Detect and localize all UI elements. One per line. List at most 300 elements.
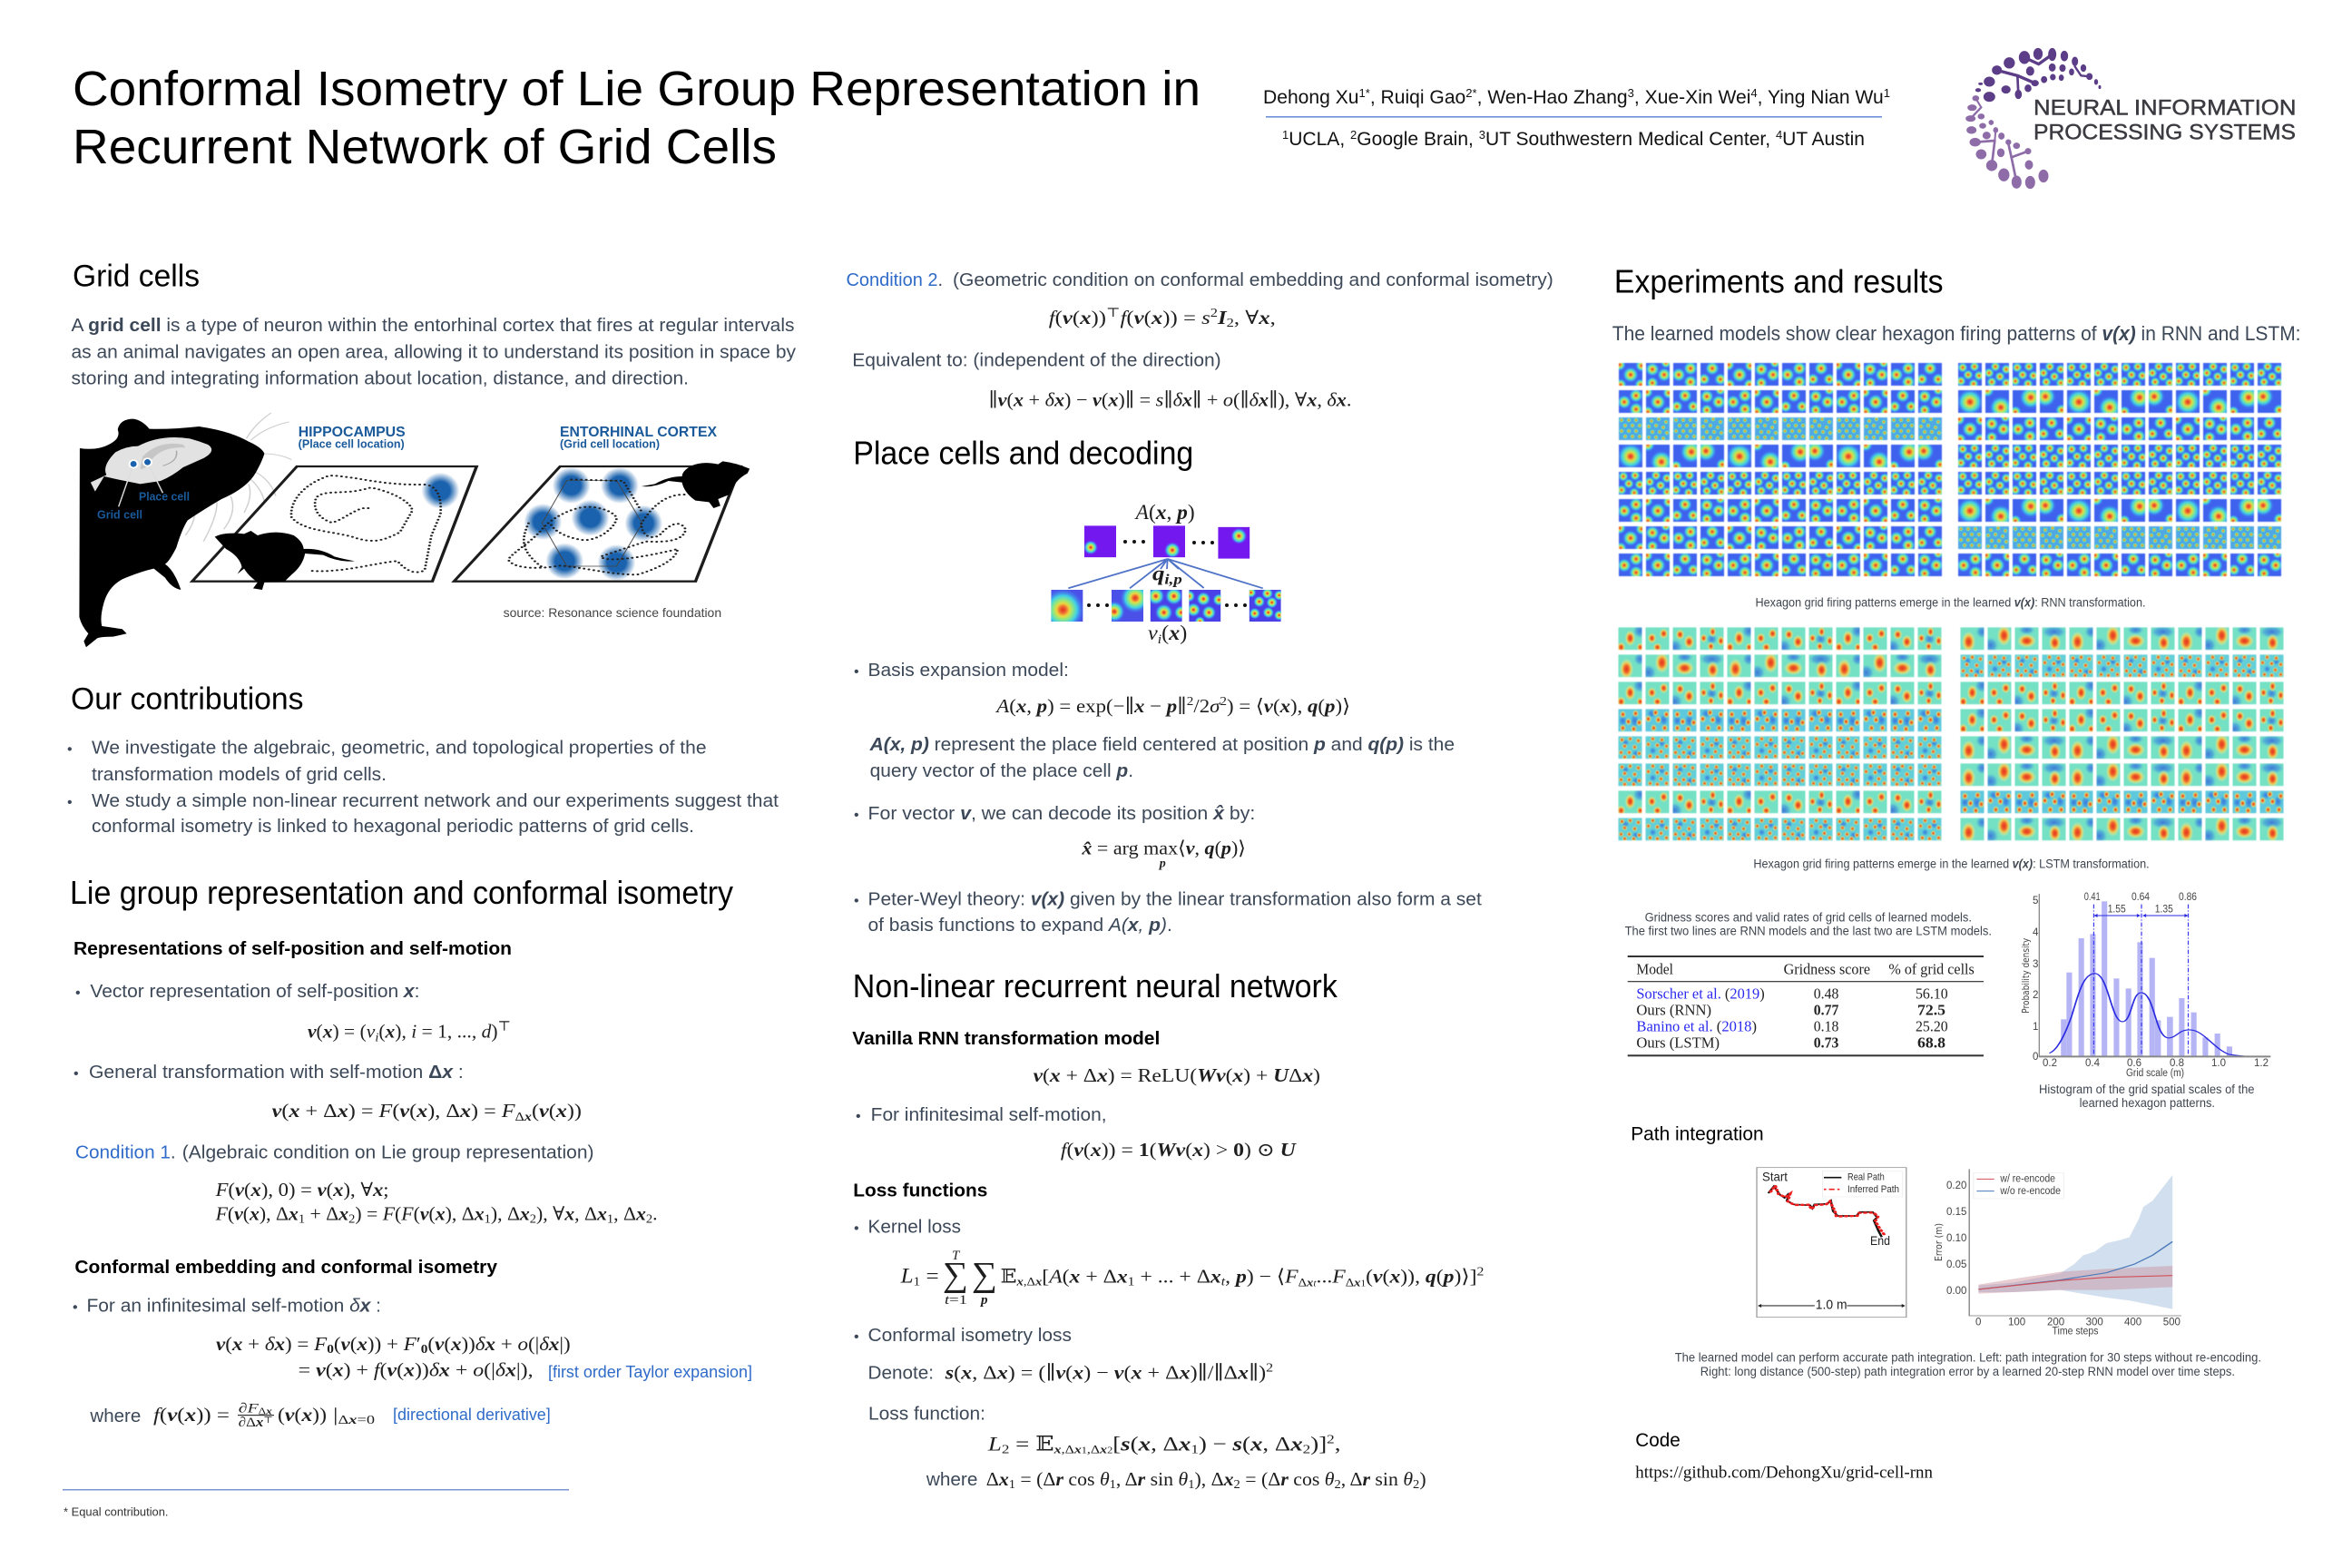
chart: grid scale histogram: 0.6 bbox=[2127, 1058, 2141, 1069]
condition 1: (Algebraic condition on Lie group representation) bbox=[182, 1143, 594, 1163]
chart: grid scale histogram: Grid scale (m) bbox=[2126, 1068, 2184, 1079]
equations: condition 1: 2 bbox=[646, 1212, 652, 1227]
caption: histogram bbox=[2039, 1083, 2254, 1110]
panel: experiments and results bbox=[1612, 263, 2301, 1482]
illustration: rat, place cells and grid cells bbox=[79, 413, 750, 647]
chart: grid scale histogram: 0.41 bbox=[2084, 892, 2101, 903]
equation: A(x,p): 2 bbox=[1187, 695, 1193, 709]
affiliations: UT Austin bbox=[1782, 129, 1865, 150]
equation: condition 2: I bbox=[1217, 307, 1228, 328]
link: repository: https://github.com/DehongXu/grid-cell-rnn bbox=[1635, 1463, 1933, 1482]
equation: L1: x1 bbox=[1354, 1276, 1366, 1289]
caption: path integration: Right: long distance (500-step) path integration error by a learned 20-step RNN model over time steps. bbox=[1700, 1365, 2235, 1378]
chart: grid scale histogram: 0.86 bbox=[2179, 892, 2197, 903]
chart: grid scale histogram: 4 bbox=[2033, 927, 2039, 938]
list: contributions bbox=[67, 739, 779, 837]
affiliations: 2 bbox=[1350, 128, 1357, 142]
chart: path integration error: 100 bbox=[2008, 1318, 2025, 1328]
affiliations: 4 bbox=[1776, 128, 1782, 142]
table: gridness scores: Sorscher et al. (2019) bbox=[1636, 985, 1765, 1003]
panel: place cells and decoding bbox=[853, 434, 1482, 936]
diagram: basis expansion: x) bbox=[1169, 622, 1187, 644]
equation: directional derivative: Δ bbox=[259, 1406, 267, 1416]
chart: path integration error: 400 bbox=[2124, 1318, 2141, 1328]
table: gridness scores: 0.77 bbox=[1814, 1001, 1839, 1018]
authors: Dehong Xu bbox=[1263, 87, 1358, 108]
equation: A(x,p): ) = ⟨ bbox=[1227, 695, 1264, 717]
equation: L1: 𝔼 bbox=[1000, 1265, 1015, 1287]
equation: directional derivative: | bbox=[333, 1404, 337, 1426]
equation: directional derivative: (v(x)) bbox=[278, 1404, 327, 1426]
bullet: Peter-Weyl: • bbox=[854, 893, 859, 908]
equation: L1: 1 bbox=[1128, 1276, 1135, 1289]
equations: condition 1: 1 bbox=[607, 1212, 613, 1227]
equation: condition 2: x, bbox=[1259, 307, 1275, 328]
equation: directional derivative bbox=[89, 1401, 551, 1430]
equations: Taylor expansion: = v(x) + f(v(x))δx + o(|δx|), bbox=[299, 1358, 534, 1380]
diagram: entorhinal cortex arena bbox=[454, 466, 740, 582]
equations: Taylor expansion: v(x)) + F′ bbox=[341, 1333, 420, 1355]
equation: where delta x: 2 bbox=[1234, 1478, 1240, 1492]
text: place field explanation bbox=[869, 735, 1455, 781]
panel: non-linear recurrent neural network bbox=[852, 967, 1484, 1492]
equation: argmax: x̂ = arg max⟨v, q(p)⟩ bbox=[1081, 838, 1246, 859]
equations: condition 1: F(v(x), 0) = v(x), ∀x; bbox=[215, 1179, 389, 1200]
condition 2 statement: (Geometric condition on conformal embedding and conformal isometry) bbox=[953, 270, 1553, 290]
title: Recurrent Network of Grid Cells bbox=[73, 120, 777, 174]
bullet: basis expansion model: Basis expansion model: bbox=[867, 661, 1069, 681]
icon: small rat, entorhinal arena bbox=[642, 461, 750, 508]
chart: grid scale histogram: 0.8 bbox=[2170, 1058, 2184, 1069]
equations: Taylor expansion: v(x + δx) = F bbox=[216, 1333, 326, 1355]
equation: where delta x: r sin θ bbox=[1138, 1468, 1188, 1490]
equation: L1: x bbox=[1015, 1274, 1024, 1289]
table: gridness scores: Ours (LSTM) bbox=[1636, 1034, 1720, 1051]
authors: , Xue-Xin Wei bbox=[1634, 87, 1750, 108]
equation: where delta x: , Δ bbox=[1116, 1468, 1138, 1490]
equations: Taylor expansion: 0 bbox=[327, 1343, 334, 1357]
equation: L1: t=1 bbox=[945, 1293, 967, 1308]
equation: directional derivative: ∂Δx bbox=[239, 1416, 262, 1430]
equations: Taylor expansion: v(x))δx + o(|δx|) bbox=[435, 1333, 570, 1355]
equation: condition 2: ⊤ bbox=[1106, 307, 1121, 320]
list: contributions: conformal isometry is linked to hexagonal periodic patterns of grid cells. bbox=[92, 817, 694, 837]
chart: path integration error: Time steps bbox=[2053, 1327, 2099, 1338]
heading: grid cells: Grid cells bbox=[73, 260, 200, 294]
illustration: rat, place cells and grid cells: (Grid cell location) bbox=[560, 437, 660, 450]
caption: table: The first two lines are RNN models and the last two are LSTM models. bbox=[1625, 925, 1992, 938]
equation: condition 2: 2 bbox=[1210, 307, 1218, 320]
table: gridness scores: Gridness score bbox=[1784, 960, 1870, 977]
chart: path integration error: 0.10 bbox=[1946, 1233, 1966, 1244]
diagram: hippocampus arena bbox=[192, 466, 476, 582]
illustration: rat, place cells and grid cells: HIPPOCAMPUS bbox=[299, 425, 406, 440]
equation: where delta x: 2 bbox=[1335, 1478, 1341, 1492]
equation: L2: s(x, Δ x bbox=[1233, 1432, 1300, 1455]
equation: L1: Δ bbox=[1346, 1276, 1354, 1289]
heading: place cells: Place cells and decoding bbox=[853, 434, 1193, 471]
equations: Taylor expansion: [first order Taylor expansion] bbox=[548, 1363, 752, 1381]
equation: L1: [ bbox=[1042, 1265, 1049, 1287]
bullet: infinitesimal: For infinitesimal self-motion, bbox=[871, 1105, 1107, 1125]
list: contributions: • bbox=[67, 742, 73, 758]
bullet: basis expansion model: • bbox=[854, 664, 859, 680]
equation: argmax: p bbox=[1159, 858, 1166, 871]
list: contributions: We investigate the algebraic, geometric, and topological properties of the bbox=[92, 739, 706, 759]
equation: where delta x: , Δ bbox=[1341, 1468, 1362, 1490]
chart: path trajectory: Real Path bbox=[1847, 1172, 1885, 1183]
equation: A(x,p): A(x, p) = exp(−∥ x − p∥ bbox=[996, 695, 1186, 717]
equation: denote s: 2 bbox=[1266, 1362, 1273, 1376]
equation: L1: F bbox=[1331, 1265, 1346, 1287]
equations: condition 1: F(F(v(x), Δx bbox=[383, 1203, 484, 1225]
equation: L2: ,Δx1,Δx2 bbox=[1062, 1442, 1112, 1455]
equation: v(x): i bbox=[375, 1031, 378, 1045]
equation: F: v(x + Δ x) = F(v(x), Δx) = F bbox=[272, 1100, 514, 1122]
table: gridness scores: % of grid cells bbox=[1888, 960, 1975, 977]
equation: directional derivative: ∂F bbox=[239, 1401, 256, 1416]
bullet: general transformation: General transformation with self-motion Δx : bbox=[89, 1063, 464, 1083]
chart: path integration error: 0.20 bbox=[1946, 1181, 1966, 1191]
equations: Taylor expansion: ( bbox=[334, 1333, 341, 1355]
chart: grid scale histogram: 1.2 bbox=[2254, 1058, 2269, 1069]
header bbox=[73, 48, 2296, 189]
equation: v(x): ⊤ bbox=[498, 1020, 511, 1034]
equation: L2: x bbox=[1053, 1442, 1062, 1455]
text: grid cell definition: as an animal navigates an open area, allowing it to understand its position in space by bbox=[71, 343, 796, 363]
affiliations: 3 bbox=[1479, 128, 1485, 142]
panel: Lie group representation and conformal isometry bbox=[70, 874, 752, 1430]
icon: small rat, hippocampus arena bbox=[215, 531, 355, 590]
equation: L1: ∑ bbox=[943, 1256, 968, 1294]
equation: L2: 2 bbox=[1303, 1443, 1310, 1456]
equation: A(x,p): σ bbox=[1210, 695, 1221, 717]
caption: RNN heatmaps: Hexagon grid firing patterns emerge in the learned v(x): RNN transformation. bbox=[1755, 595, 2145, 609]
table: gridness scores: 72.5 bbox=[1917, 1001, 1945, 1018]
footnote: * Equal contribution. bbox=[64, 1505, 169, 1519]
equation: L2: L bbox=[987, 1432, 1002, 1455]
equation: where delta x: 2 bbox=[1413, 1478, 1419, 1492]
authors: 3 bbox=[1628, 86, 1634, 100]
equations: condition 1: ), ∀ bbox=[536, 1203, 565, 1225]
equation: L2: 2 bbox=[1327, 1433, 1335, 1446]
subheading: conformal embedding: Conformal embedding and conformal isometry bbox=[74, 1258, 498, 1278]
heatmap grid: RNN right bbox=[1958, 363, 2281, 576]
equation: L2: = 𝔼 bbox=[1009, 1432, 1054, 1455]
logo: NeurIPS: PROCESSING SYSTEMS bbox=[2034, 120, 2296, 144]
chart: path integration error: 0.05 bbox=[1946, 1259, 1966, 1270]
equations: condition 1: x, Δx bbox=[564, 1203, 607, 1225]
chart: path integration error: 200 bbox=[2047, 1318, 2064, 1328]
equation: A(x,p): v(x), q(p)⟩ bbox=[1264, 695, 1349, 717]
chart: grid scale histogram: 1.35 bbox=[2155, 905, 2173, 916]
equation: L1: ∑ bbox=[972, 1256, 997, 1294]
equation: F: x bbox=[524, 1111, 532, 1124]
equation: where delta x: ) bbox=[1419, 1468, 1426, 1490]
chart: grid scale histogram: 0 bbox=[2033, 1052, 2038, 1063]
equation: L2: [ bbox=[1112, 1432, 1121, 1455]
equations: condition 1 bbox=[215, 1179, 658, 1227]
chart: grid scale histogram: 3 bbox=[2033, 959, 2038, 970]
chart: grid scale histogram: 0.64 bbox=[2132, 892, 2151, 903]
chart: grid scale histogram: 1 bbox=[2033, 1022, 2038, 1033]
text: grid cell definition bbox=[71, 316, 796, 388]
equations: condition 1: F(v(x), Δx bbox=[216, 1203, 299, 1225]
equation: f(v(x)): f(v(x)) = 1(Wv(x) > 0) ⊙ U bbox=[1061, 1139, 1298, 1161]
affiliations: 1 bbox=[1282, 128, 1289, 142]
bullet: decoding: • bbox=[854, 808, 859, 823]
diagram: basis expansion: A(x, p) bbox=[1134, 501, 1195, 524]
bullet: kernel loss: • bbox=[854, 1220, 859, 1236]
panel: our contributions bbox=[67, 682, 779, 837]
authors: 1 bbox=[1884, 86, 1890, 100]
authors: , Ruiqi Gao bbox=[1370, 87, 1465, 108]
panel: code bbox=[1635, 1430, 1933, 1482]
table: gridness scores: 56.10 bbox=[1916, 985, 1948, 1003]
equations: condition 1: x bbox=[519, 1203, 530, 1225]
equation: v(x): ( bbox=[378, 1020, 386, 1042]
histogram bars bbox=[2061, 901, 2232, 1056]
equation: A(x,p): 2 bbox=[1220, 695, 1227, 709]
diagram: basis expansion: i bbox=[1158, 632, 1161, 647]
authors: 4 bbox=[1750, 86, 1758, 100]
authors: , Ying Nian Wu bbox=[1758, 87, 1884, 108]
equation: where delta x: Δx bbox=[986, 1468, 1008, 1490]
equations: condition 1: ), Δ bbox=[491, 1203, 520, 1225]
caption: histogram: Histogram of the grid spatial scales of the bbox=[2039, 1083, 2254, 1096]
illustration: rat, place cells and grid cells: (Place cell location) bbox=[299, 437, 405, 450]
equation: denote s: s(x, Δx) = (∥ v(x) − v(x + Δx)∥/∥Δ x∥) bbox=[946, 1362, 1264, 1384]
table: gridness scores: 0.48 bbox=[1814, 985, 1838, 1003]
equation: L1: x bbox=[1210, 1265, 1221, 1287]
text: place field explanation: A(x, p) represent the place field centered at position p and q(p) is the bbox=[869, 735, 1455, 755]
logo: NeurIPS: NEURAL INFORMATION bbox=[2034, 96, 2296, 121]
text: place field explanation: query vector of the place cell p. bbox=[870, 761, 1133, 781]
equations: condition 1: 1 bbox=[299, 1212, 305, 1227]
equations: Taylor expansion bbox=[216, 1333, 752, 1381]
equation: where delta x: where bbox=[926, 1470, 977, 1490]
bullet: Peter-Weyl: of basis functions to expand A(x, p). bbox=[867, 916, 1172, 936]
bullet: vector representation: • bbox=[75, 985, 81, 1001]
equation: L1: ,Δx bbox=[1024, 1274, 1041, 1289]
bullet: conformal isometry loss: • bbox=[854, 1329, 859, 1345]
chart: path trajectory: 1.0 m bbox=[1816, 1297, 1847, 1312]
equation: where delta x: r cos θ bbox=[1055, 1468, 1109, 1490]
bullet: infinitesimal self-motion: • bbox=[73, 1299, 78, 1316]
text: grid cell definition: storing and integrating information about location, distance, and direction. bbox=[71, 368, 689, 388]
equation: where delta x: = (Δ bbox=[1015, 1468, 1055, 1490]
chart: path integration error bbox=[1934, 1169, 2181, 1338]
authors: 2* bbox=[1465, 86, 1477, 100]
chart: grid scale histogram: Probability density bbox=[2021, 938, 2032, 1014]
equation: conformal isometry: ∥v(x + δx) − v(x)∥ = s∥δx∥ + o(∥δx∥), ∀x, δx. bbox=[988, 389, 1351, 411]
equation: argmax bbox=[1081, 838, 1246, 871]
bullet: kernel loss: Kernel loss bbox=[867, 1217, 961, 1237]
table: gridness scores: Banino et al. (2018) bbox=[1636, 1018, 1757, 1035]
chart: path trajectory bbox=[1757, 1168, 1906, 1318]
chart: path integration error: 500 bbox=[2163, 1318, 2180, 1328]
equation: v(x): x), i = 1, ..., d) bbox=[386, 1020, 497, 1042]
table: gridness scores: 68.8 bbox=[1917, 1034, 1945, 1051]
equation: L1: t bbox=[1221, 1276, 1226, 1289]
diagram: basis expansion: v bbox=[1148, 622, 1159, 644]
heatmap grid: LSTM left bbox=[1619, 627, 1942, 840]
chart: grid scale histogram: 2 bbox=[2033, 990, 2038, 1001]
authors: 1* bbox=[1358, 86, 1370, 100]
equations: Taylor expansion: 0 bbox=[421, 1343, 427, 1357]
text: grid cell definition: A grid cell is a type of neuron within the entorhinal cortex that fires at regular intervals bbox=[71, 316, 795, 336]
text: loss function: Loss function: bbox=[868, 1405, 985, 1425]
equation: F: Δ bbox=[515, 1111, 524, 1124]
equation: L1: ( bbox=[1366, 1265, 1373, 1287]
caption: path integration: The learned model can perform accurate path integration. Left: path integration for 30 steps without re-encoding. bbox=[1675, 1351, 2261, 1365]
equation: F: v(x)) bbox=[539, 1100, 580, 1122]
equation: L1: A(x + Δx bbox=[1049, 1265, 1126, 1287]
list: contributions: transformation models of grid cells. bbox=[92, 765, 387, 785]
equation: L2: 1 bbox=[1191, 1443, 1199, 1456]
affiliations: UCLA, bbox=[1289, 129, 1350, 150]
chart: grid scale histogram: 1.0 bbox=[2211, 1058, 2226, 1069]
equation: L1: ... bbox=[1317, 1265, 1332, 1287]
equation: where delta x: 1 bbox=[1110, 1478, 1116, 1492]
equation: where delta x: ), Δ bbox=[1194, 1468, 1224, 1490]
heatmap grid: RNN left bbox=[1619, 363, 1942, 576]
equation: L1: Δ bbox=[1298, 1276, 1307, 1289]
table: gridness scores bbox=[1625, 911, 1992, 1056]
chart: path trajectory: Inferred Path bbox=[1847, 1184, 1899, 1195]
chart: grid scale histogram: 1.55 bbox=[2108, 905, 2126, 916]
bullet: decoding: For vector v, we can decode its position x̂ by: bbox=[867, 804, 1255, 824]
diagram: basis expansion: i,p bbox=[1164, 572, 1182, 587]
chart: path integration error: 0 bbox=[1975, 1318, 1981, 1328]
icon: brain bbox=[91, 437, 211, 506]
equation: directional derivative: x=0 bbox=[348, 1414, 370, 1427]
chart: path integration error: 0.15 bbox=[1946, 1207, 1966, 1218]
panel: grid cells bbox=[71, 260, 796, 647]
equation: L2: s(x, Δ x bbox=[1121, 1432, 1189, 1455]
affiliations: Google Brain, bbox=[1357, 129, 1479, 150]
equation: where delta x: = (Δ bbox=[1240, 1468, 1280, 1490]
text: equivalent: Equivalent to: (independent of the direction) bbox=[852, 350, 1221, 370]
equation: where delta x: r sin θ bbox=[1362, 1468, 1413, 1490]
equation: where delta x bbox=[926, 1468, 1426, 1492]
equations: Taylor expansion: ( bbox=[427, 1333, 435, 1355]
equations: condition 1: x bbox=[635, 1203, 646, 1225]
equation: directional derivative: x bbox=[265, 1406, 272, 1416]
list: contributions: • bbox=[67, 795, 73, 810]
equation: where delta x: r cos θ bbox=[1280, 1468, 1334, 1490]
condition 1: Condition 1. bbox=[75, 1143, 176, 1163]
equation: L2: , bbox=[1335, 1432, 1341, 1455]
chart: grid scale histogram: 0.2 bbox=[2043, 1058, 2057, 1069]
title bbox=[73, 62, 1200, 174]
equation: L2: )] bbox=[1310, 1432, 1327, 1455]
chart: grid scale histogram: 0.4 bbox=[2085, 1058, 2101, 1069]
panel: path integration bbox=[1631, 1124, 2261, 1378]
equations: condition 1: . bbox=[652, 1203, 658, 1225]
equation: L2: ) − bbox=[1199, 1432, 1233, 1455]
heading: non-linear RNN: Non-linear recurrent neural network bbox=[853, 967, 1338, 1004]
equation: directional derivative: Δ bbox=[338, 1414, 348, 1427]
equation: where delta x: x bbox=[1223, 1468, 1234, 1490]
bullet: general transformation: • bbox=[74, 1066, 79, 1082]
heading: Lie group representation: Lie group representation and conformal isometry bbox=[70, 874, 733, 911]
equation: directional derivative: f(v(x)) = bbox=[153, 1404, 230, 1426]
bullet: infinitesimal: • bbox=[856, 1109, 861, 1124]
equation: L1: p) − ⟨F bbox=[1236, 1265, 1297, 1287]
equation: RNN: v(x + Δx) = ReLU( Wv(x) + UΔx) bbox=[1034, 1064, 1320, 1086]
caption: table bbox=[1625, 911, 1992, 938]
place field tiles bbox=[1083, 525, 1250, 559]
equation: condition 2: f(v(x)) bbox=[1049, 307, 1104, 328]
heatmap grid: LSTM right bbox=[1960, 627, 2283, 840]
equations: condition 1: ) = bbox=[355, 1203, 383, 1225]
subheading: loss functions: Loss functions bbox=[853, 1181, 987, 1200]
authors: , Wen-Hao Zhang bbox=[1477, 87, 1628, 108]
equation: L1: 2 bbox=[1477, 1265, 1484, 1279]
equation: F: ( bbox=[532, 1100, 539, 1122]
chart: path integration error: w/ re-encode bbox=[1999, 1174, 2055, 1185]
equations: condition 1: , Δ bbox=[613, 1203, 636, 1225]
heading: experiments: Experiments and results bbox=[1614, 263, 1944, 300]
equation: v(x): v(x) = (v bbox=[308, 1020, 375, 1042]
equations: condition 1: 1 bbox=[485, 1212, 491, 1227]
illustration: rat, place cells and grid cells: Grid cell bbox=[97, 508, 142, 522]
chart: path trajectory: Start bbox=[1762, 1170, 1788, 1184]
equation: L1: p bbox=[979, 1293, 988, 1308]
equation: denote s: Denote: bbox=[867, 1364, 934, 1384]
equations: condition 1: 2 bbox=[348, 1212, 355, 1227]
bullet: conformal isometry loss: Conformal isometry loss bbox=[867, 1326, 1072, 1346]
diagram: basis expansion: q bbox=[1152, 562, 1163, 584]
bullet: vector representation: Vector representation of self-position x: bbox=[90, 982, 419, 1002]
diagram: basis expansion bbox=[1041, 501, 1285, 647]
chart: grid scale histogram: 5 bbox=[2033, 896, 2038, 906]
heading: path integration: Path integration bbox=[1631, 1124, 1764, 1145]
illustration: rat, place cells and grid cells: source: Resonance science foundation bbox=[504, 605, 721, 620]
equation: condition 2: (v(x)) = s bbox=[1126, 307, 1209, 328]
equation: where delta x: 1 bbox=[1188, 1478, 1194, 1492]
equation: condition 2: 2 bbox=[1227, 317, 1234, 330]
illustration: rat, place cells and grid cells: Place cell bbox=[139, 490, 190, 504]
icon: large rat silhouette bbox=[79, 419, 264, 647]
equation: L1: L bbox=[900, 1265, 914, 1287]
title: Conformal Isometry of Lie Group Representation in bbox=[73, 62, 1200, 116]
equation: where delta x: 1 bbox=[1009, 1478, 1015, 1492]
panel: condition 2 bbox=[846, 270, 1553, 411]
bullet: Peter-Weyl bbox=[854, 889, 1482, 936]
table: gridness scores: Ours (RNN) bbox=[1636, 1001, 1711, 1018]
basis function tiles bbox=[1041, 583, 1285, 632]
equation: L1: v(x)), q(p)⟩] bbox=[1373, 1265, 1475, 1287]
subheading: representations: Representations of self-position and self-motion bbox=[74, 939, 512, 959]
equation: A(x,p): /2 bbox=[1193, 695, 1210, 717]
equation: L1: = bbox=[920, 1265, 939, 1287]
caption: histogram: learned hexagon patterns. bbox=[2080, 1096, 2215, 1110]
equation: condition 2: , ∀ bbox=[1234, 307, 1259, 328]
equation: L1: T bbox=[952, 1249, 961, 1263]
chart: path integration error: w/o re-encode bbox=[1999, 1186, 2061, 1197]
text: learned models: The learned models show clear hexagon firing patterns of v(x) in RNN and LSTM: bbox=[1612, 322, 2301, 345]
subheading: vanilla RNN: Vanilla RNN transformation model bbox=[852, 1029, 1160, 1049]
affiliations: UT Southwestern Medical Center, bbox=[1485, 129, 1776, 150]
bullet: infinitesimal self-motion: For an infinitesimal self-motion δx : bbox=[87, 1296, 381, 1316]
heading: code: Code bbox=[1635, 1430, 1681, 1451]
equation: directional derivative: where bbox=[89, 1406, 141, 1426]
illustration: rat, place cells and grid cells: ENTORHINAL CORTEX bbox=[560, 425, 717, 440]
table: gridness scores: Model bbox=[1636, 960, 1673, 977]
equation: L1 bbox=[900, 1249, 1484, 1308]
